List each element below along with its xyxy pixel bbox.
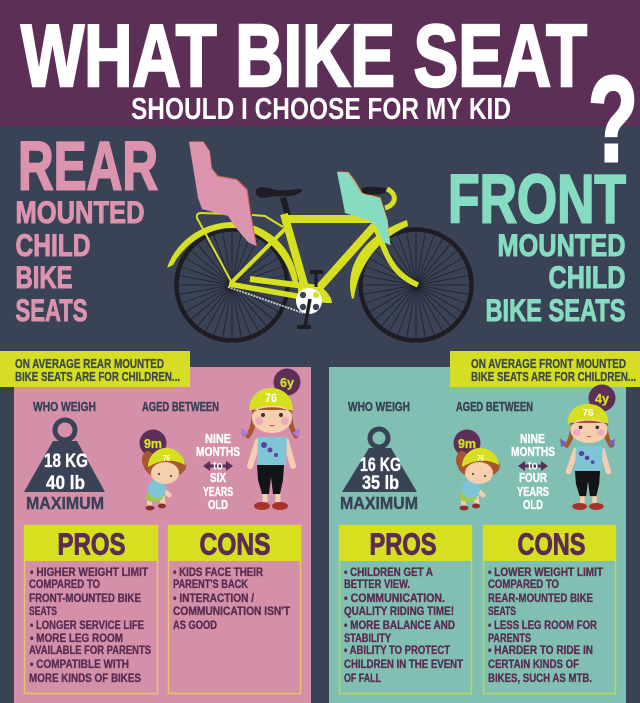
box: front pros: OF FALL — [344, 671, 381, 685]
box: front cons: CERTAIN KINDS OF — [488, 657, 579, 671]
icon: baby rear: 76 — [163, 454, 170, 463]
age range text: rear: NINE — [205, 431, 231, 446]
saddle — [256, 187, 302, 216]
box: front cons: • LOWER WEIGHT LIMIT — [488, 565, 604, 579]
box: rear pros: • COMPATIBLE WITH — [30, 657, 129, 671]
crankset and pedals — [296, 270, 323, 329]
box: front pros: • CHILDREN GET A — [344, 565, 433, 579]
box: front cons: CONS — [518, 526, 586, 562]
heading: rear mounted child bike seats: SEATS — [16, 292, 88, 328]
badge: 9 months rear: 9m — [144, 436, 162, 451]
age range text: rear: SIX — [210, 470, 226, 485]
icon: baby rear — [142, 448, 186, 510]
box: front cons: BIKES, SUCH AS MTB. — [488, 671, 592, 685]
box: rear pros: COMPARED TO — [29, 577, 100, 591]
box: rear pros: SEATS — [29, 604, 57, 618]
pink rear seat — [189, 141, 257, 246]
age range text: front: FOUR — [519, 470, 547, 485]
banner: rear seats — [0, 351, 190, 387]
mint front seat — [337, 172, 390, 245]
icon: baby front: 76 — [477, 454, 484, 463]
box: rear cons — [168, 525, 301, 694]
heading: rear mounted child bike seats: BIKE — [16, 259, 72, 295]
age range text: rear: MONTHS — [196, 444, 240, 459]
label: who weigh front: WHO WEIGH — [348, 399, 410, 414]
chain — [228, 287, 303, 313]
handlebar grip — [362, 187, 386, 195]
icon: weight 16 kg: MAXIMUM — [340, 493, 418, 513]
age range text: rear: OLD — [208, 497, 228, 512]
panel: rear seats — [14, 367, 311, 703]
label: who weigh rear: WHO WEIGH — [33, 399, 96, 414]
icon: weight 16 kg — [340, 429, 418, 513]
subtitle: SHOULD I CHOOSE FOR MY KID — [131, 91, 511, 126]
icon: baby front — [456, 448, 500, 510]
front fender — [350, 220, 408, 299]
age range text: front: YEARS — [517, 484, 549, 499]
box: rear cons: PARENT'S BACK — [173, 577, 248, 591]
age range text: front: NINE — [520, 431, 545, 446]
icon: weight 18 kg: MAXIMUM — [26, 493, 104, 513]
badge: 9 months front — [454, 430, 480, 456]
icon: weight 18 kg — [24, 420, 105, 513]
box: front cons: SEATS — [488, 604, 516, 618]
banner: rear seats: BIKE SEATS ARE FOR CHILDREN... — [15, 369, 180, 384]
icon: weight 16 kg: 16 KG — [360, 455, 401, 476]
rear fender — [167, 222, 298, 283]
box: rear cons: • INTERACTION / — [173, 591, 255, 605]
box: front pros — [339, 525, 472, 694]
badge: 9 months front: 9m — [458, 436, 476, 451]
banner: front seats — [450, 351, 640, 387]
icon: girl rear: 76 — [265, 391, 277, 405]
badge: 9 months rear — [140, 430, 166, 456]
age range text: front — [511, 431, 555, 512]
frame — [229, 189, 418, 298]
age range text: rear: YEARS — [203, 484, 233, 499]
heading: rear mounted child bike seats: MOUNTED — [16, 194, 144, 230]
age range text: front: MONTHS — [511, 444, 555, 459]
box: rear cons: CONS — [200, 526, 270, 562]
box: rear pros: • HIGHER WEIGHT LIMIT — [30, 565, 149, 579]
box: rear pros: • MORE LEG ROOM — [30, 631, 123, 645]
box: front pros: QUALITY RIDING TIME! — [344, 604, 454, 618]
box: rear pros — [24, 525, 158, 694]
badge: 6 years — [274, 368, 300, 396]
icon: girl rear — [241, 388, 300, 510]
heading: rear mounted child bike seats — [16, 128, 158, 328]
age range text: rear: to — [213, 458, 223, 472]
box: front cons: PARENTS — [488, 631, 531, 645]
icon: girl front — [560, 404, 615, 510]
box: front cons: COMPARED TO — [488, 577, 559, 591]
icon: weight 16 kg: 35 lb — [362, 473, 399, 494]
box: rear pros: AVAILABLE FOR PARENTS — [29, 643, 151, 657]
age range text: front: OLD — [523, 497, 543, 512]
box: rear cons: • KIDS FACE THEIR — [173, 565, 263, 579]
box: front pros: PROS — [370, 526, 436, 562]
box: front cons: • HARDER TO RIDE IN — [488, 643, 593, 657]
icon: weight 18 kg: 40 lb — [46, 473, 85, 494]
box: rear pros: • LONGER SERVICE LIFE — [30, 618, 144, 632]
box: rear cons: AS GOOD — [173, 618, 217, 632]
box: rear pros: MORE KINDS OF BIKES — [29, 671, 141, 685]
box: rear cons: COMMUNICATION ISN'T — [173, 604, 291, 618]
badge: 4 years — [588, 384, 616, 412]
label: aged between rear: AGED BETWEEN — [142, 399, 219, 414]
heading: rear mounted child bike seats: REAR — [18, 128, 158, 204]
age range text: front: to — [528, 458, 538, 472]
label: aged between front: AGED BETWEEN — [456, 399, 533, 414]
icon: weight 18 kg: 18 KG — [44, 451, 88, 472]
age range text: rear — [196, 431, 240, 512]
luggage rack — [197, 213, 283, 283]
header band — [0, 0, 640, 126]
box: front pros: BETTER VIEW. — [344, 577, 410, 591]
box: front pros: CHILDREN IN THE EVENT — [344, 657, 464, 671]
chainguard — [298, 282, 332, 303]
banner: rear seats: ON AVERAGE REAR MOUNTED — [15, 356, 164, 371]
box: front pros: • COMMUNICATION. — [344, 591, 445, 605]
box: front cons: • LESS LEG ROOM FOR — [488, 618, 597, 632]
badge: 6 years: 6y — [280, 375, 295, 390]
icon: girl front: 76 — [582, 407, 594, 419]
rear wheel — [176, 230, 288, 340]
heading: rear mounted child bike seats: CHILD — [16, 227, 90, 263]
front wheel — [360, 230, 472, 340]
box: front pros: STABILITY — [344, 631, 391, 645]
box: front cons — [483, 525, 616, 694]
bicycle illustration — [167, 141, 472, 340]
box: front cons: REAR-MOUNTED BIKE — [488, 591, 593, 605]
box: front pros: • ABILITY TO PROTECT — [344, 643, 451, 657]
badge: 4 years: 4y — [595, 391, 610, 406]
box: rear pros: FRONT-MOUNTED BIKE — [29, 591, 141, 605]
panel: front seats — [329, 367, 626, 703]
box: front pros: • MORE BALANCE AND — [344, 618, 455, 632]
box: rear pros: PROS — [58, 526, 126, 562]
heading: front mounted child bike seats — [448, 160, 626, 328]
